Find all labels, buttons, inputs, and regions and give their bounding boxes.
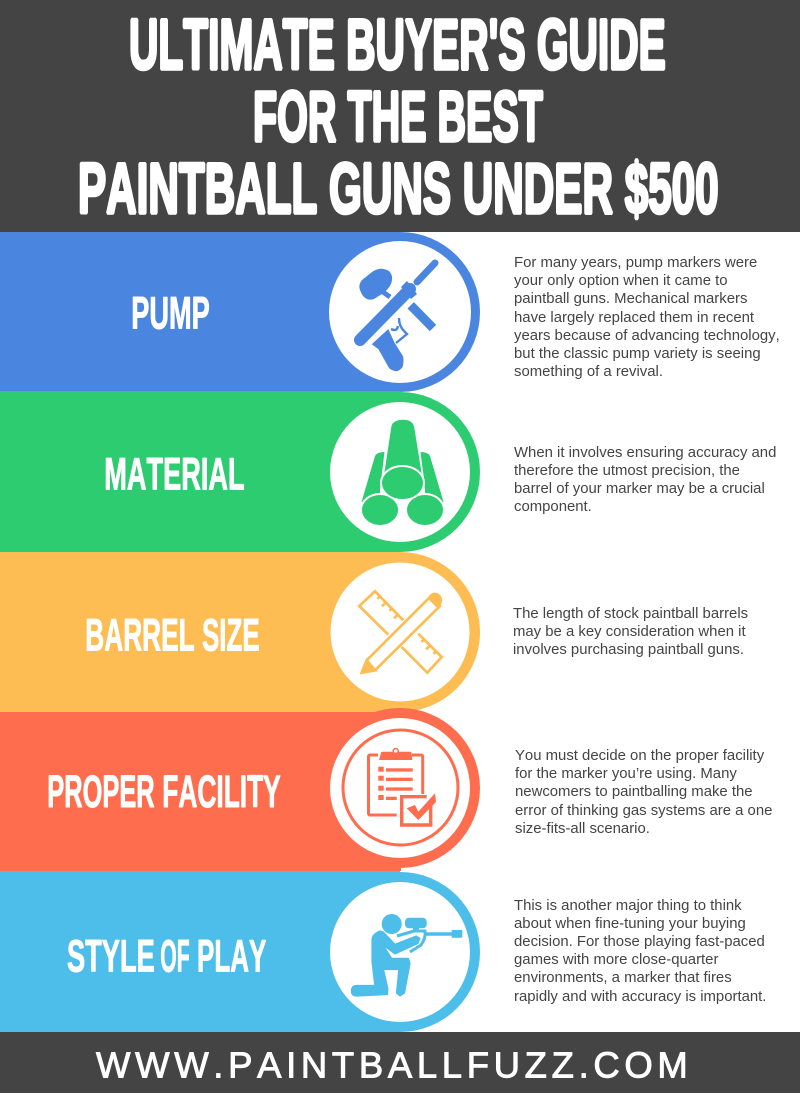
title [78, 7, 719, 229]
title: FOR THE BEST [253, 78, 543, 157]
icon: kneeling shooter [352, 914, 462, 996]
heading: proper facility: FACILITY [162, 767, 281, 817]
panel: material [0, 391, 480, 552]
heading: barrel size: BARREL [85, 610, 195, 660]
description: style of play: This is another major thing to think [514, 898, 742, 914]
heading: proper facility [47, 766, 281, 817]
heading: style of play [67, 930, 266, 982]
website url: WWW.PAINTBALLFUZZ.COM [96, 1044, 692, 1086]
panel: pump [0, 232, 480, 392]
heading: style of play: PLAY [197, 931, 266, 981]
description: pump: have largely replaced them in recent [514, 310, 755, 326]
header banner [0, 0, 800, 232]
description: material: therefore the utmost precision, the [514, 463, 740, 479]
description: style of play: rapidly and with accuracy is important. [514, 989, 766, 1005]
panel: proper facility [0, 708, 480, 871]
description: proper facility: for the marker you’re using. Many [515, 766, 737, 782]
panel: barrel size [0, 552, 480, 712]
description: pump: something of a revival. [514, 364, 663, 380]
heading: pump: PUMP [131, 287, 210, 338]
heading: proper facility: PROPER [47, 766, 155, 817]
icon: ruler and pencil [359, 591, 442, 673]
description: material: When it involves ensuring accuracy and [514, 445, 776, 461]
description: style of play: decision. For those playing fast-paced [514, 934, 765, 950]
description: proper facility: newcomers to paintballing make the [515, 784, 753, 800]
description: material: component. [514, 499, 592, 515]
description: pump: paintball guns. Mechanical markers [514, 291, 747, 307]
description: proper facility: You must decide on the proper facility [515, 748, 765, 764]
description: proper facility: size-fits-all scenario. [515, 821, 650, 837]
description: pump: For many years, pump markers were [514, 255, 757, 271]
description: pump: but the classic pump variety is seeing [514, 346, 761, 362]
description: style of play: environments, a marker that fires [514, 970, 732, 986]
description: barrel size: may be a key consideration when it [513, 624, 746, 640]
description: material: barrel of your marker may be a crucial [514, 481, 765, 497]
icon: barrels [361, 419, 444, 526]
description: proper facility: error of thinking gas systems are a one [515, 803, 772, 819]
icon: paintball marker [359, 263, 435, 371]
heading: barrel size [85, 610, 260, 660]
description: barrel size: The length of stock paintball barrels [513, 606, 748, 622]
description: style of play: about when fine-tuning your buying [514, 916, 746, 932]
heading: material: MATERIAL [104, 448, 245, 499]
heading: barrel size: SIZE [202, 610, 260, 660]
description: pump: years because of advancing technology, [514, 328, 780, 344]
description: barrel size: involves purchasing paintball guns. [513, 642, 744, 658]
panel: style of play [0, 871, 480, 1032]
description: style of play: games with more close-quarter [514, 952, 718, 968]
heading: style of play: STYLE [67, 930, 155, 981]
title: PAINTBALL GUNS UNDER $500 [78, 150, 719, 229]
icon: clipboard checklist [368, 748, 436, 825]
title: ULTIMATE BUYER'S GUIDE [129, 7, 666, 85]
heading: style of play: OF [160, 932, 190, 982]
description: pump: your only option when it came to [514, 273, 728, 289]
footer banner [0, 1032, 800, 1093]
